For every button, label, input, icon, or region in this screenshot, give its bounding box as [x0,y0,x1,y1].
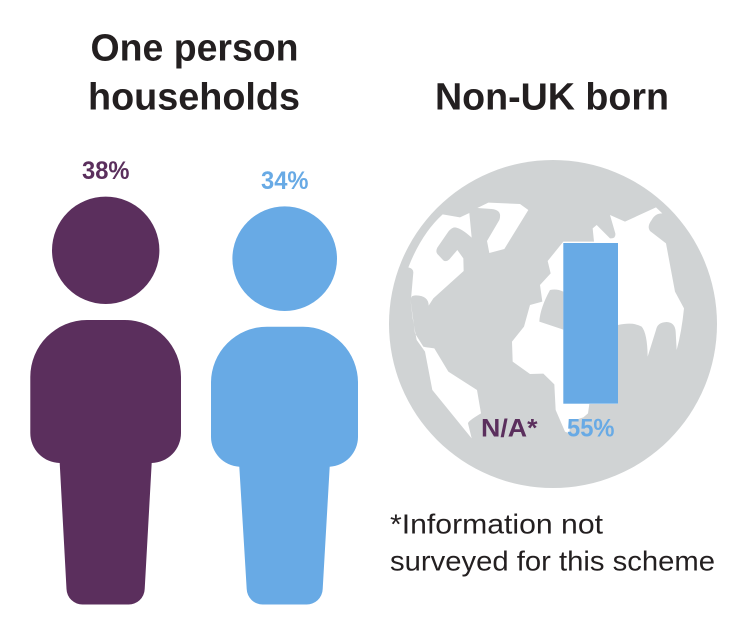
footnote: *Information not [390,508,603,540]
bar: 55% [563,243,618,404]
heading: One person households: One person [90,28,298,70]
label: 34%: 34% [261,167,308,195]
icon: blue person [211,206,358,605]
footnote: surveyed for this scheme [390,546,715,576]
footnote [390,508,715,576]
label: 55%: 55% [567,414,614,442]
heading: One person households: households [88,76,300,118]
icon: globe [389,160,717,488]
label: N/A*: N/A* [481,414,538,442]
label: 38%: 38% [82,157,130,185]
heading: Non-UK born: Non-UK born [435,76,669,118]
heading: One person households [88,28,300,118]
icon: purple person [30,197,181,605]
